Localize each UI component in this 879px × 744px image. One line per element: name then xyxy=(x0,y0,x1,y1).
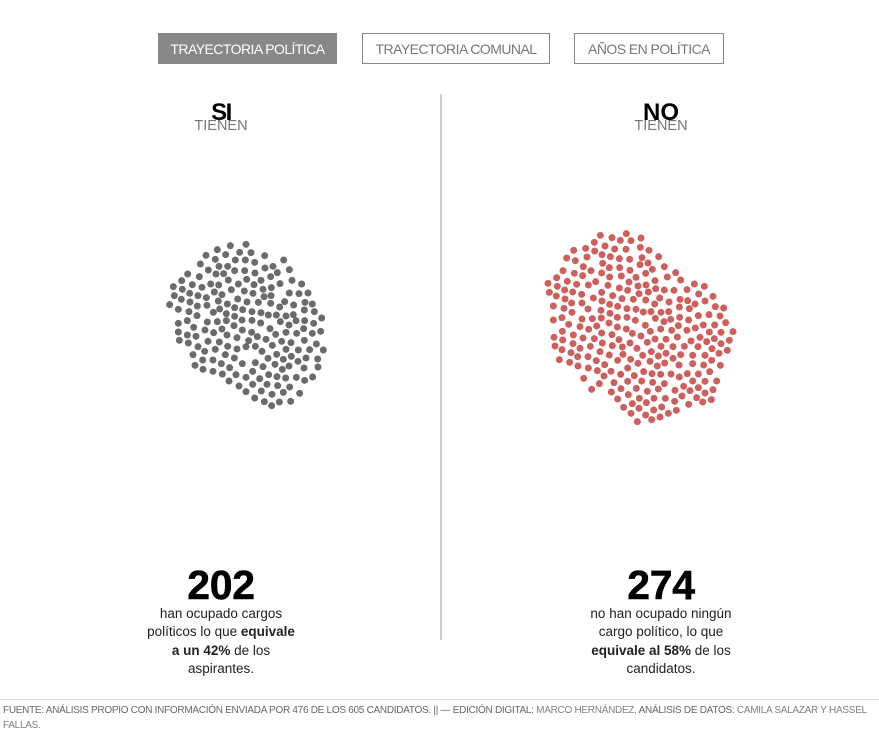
heading: no: NO xyxy=(643,99,679,126)
heading: si: SI xyxy=(211,99,231,126)
footer credits: FUENTE: ANÁLISIS PROPIO CON INFORMACIÓN ENVIADA POR 476 DE LOS 605 CANDIDATOS. || — EDICIÓN DIGITAL: MARCO HERNÁNDEZ, ANÁLISIS DE DATOS: CAMILA SALAZAR Y HASSEL xyxy=(3,704,867,716)
text: si description xyxy=(147,606,295,676)
center divider xyxy=(440,94,442,640)
text: no description: equivale al 58% de los xyxy=(591,642,731,658)
text: no description: no han ocupado ningún xyxy=(590,606,732,620)
footer rule xyxy=(0,699,879,700)
button: trayectoria comunal xyxy=(362,33,550,64)
dot cluster: si, gray xyxy=(166,240,327,410)
footer credits: FALLAS. xyxy=(3,720,41,730)
footer credits xyxy=(3,704,867,730)
text: si description: a un 42% de los xyxy=(172,642,270,658)
dot cluster: no, red xyxy=(544,230,736,426)
number: 202: 202 xyxy=(187,562,255,608)
button: anos en politica xyxy=(574,33,724,64)
text: si description: aspirantes. xyxy=(188,661,254,676)
text: no description: cargo político, lo que xyxy=(599,624,723,639)
text: si description: han ocupado cargos xyxy=(160,606,282,620)
number: 274: 274 xyxy=(627,562,695,608)
button: trayectoria politica xyxy=(158,33,337,64)
subheading: tienen left: TIENEN xyxy=(194,118,248,134)
text: si description: políticos lo que equivale xyxy=(147,624,295,639)
text: no description: candidatos. xyxy=(626,661,696,676)
button: trayectoria politica: TRAYECTORIA POLÍTICA xyxy=(170,41,325,57)
button: trayectoria comunal: TRAYECTORIA COMUNAL xyxy=(376,41,536,57)
subheading: tienen right: TIENEN xyxy=(634,118,688,134)
text: no description xyxy=(590,606,732,676)
button: anos en politica: AÑOS EN POLÍTICA xyxy=(588,41,710,57)
